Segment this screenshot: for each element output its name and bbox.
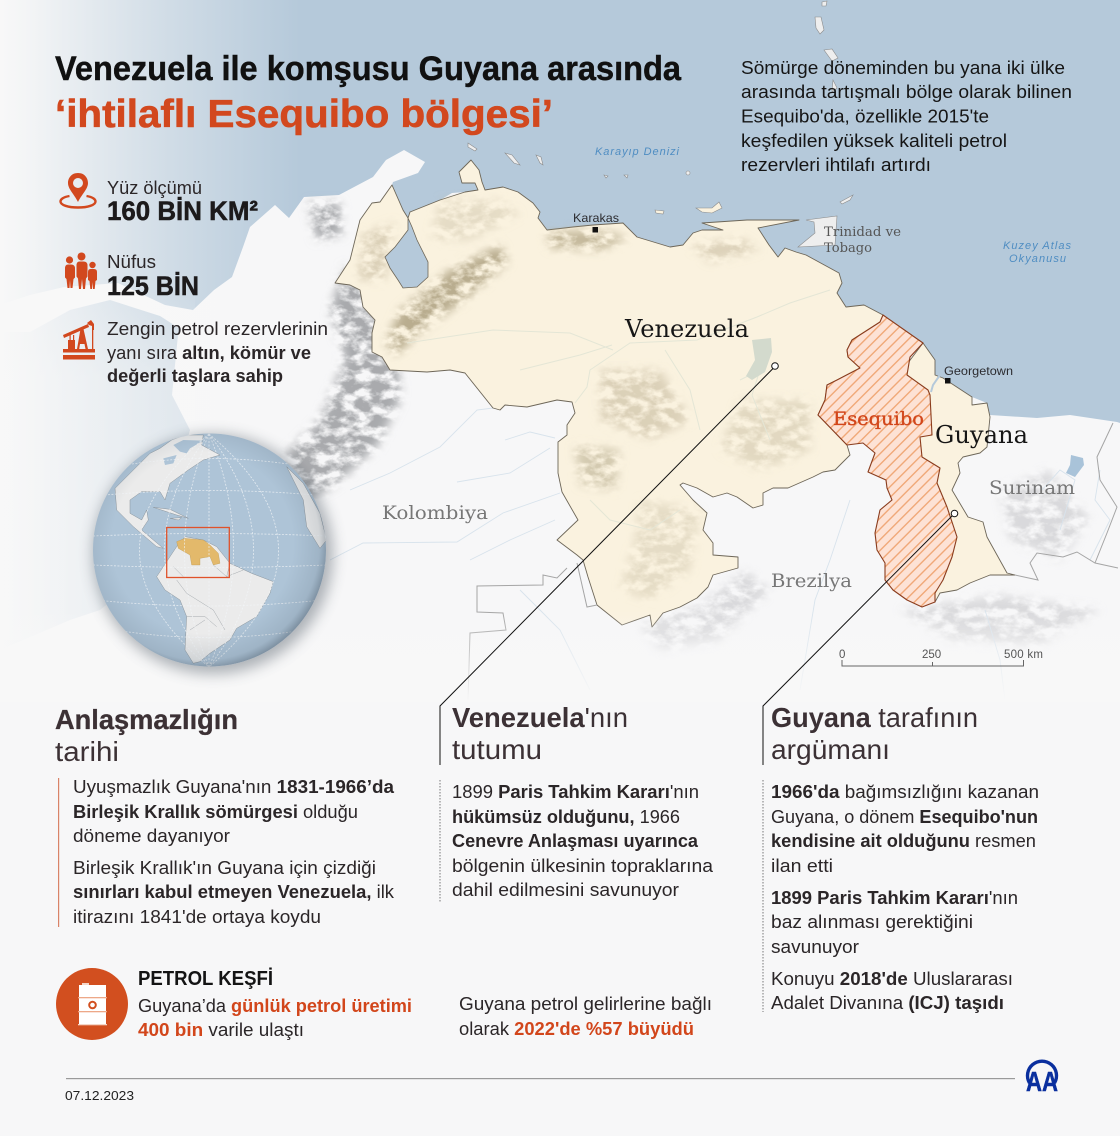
- history text: itirazını 1841'de ortaya koydu: [73, 907, 321, 927]
- disputed region: Esequibo: [818, 315, 957, 607]
- heading: Venezuela'nın: [452, 702, 628, 733]
- globe land: [115, 435, 327, 663]
- left side fade: [0, 0, 300, 700]
- country: Guyana: [880, 343, 1015, 602]
- map label: Brezilya: Brezilya: [771, 570, 852, 592]
- history text: Uyuşmazlık Guyana'nın 1831-1966’da: [73, 777, 395, 797]
- leader line to Guyana: [763, 510, 958, 765]
- intro paragraph: arasında tartışmalı bölge olarak bilinen: [741, 82, 1072, 102]
- Venezuela relief: [358, 200, 810, 600]
- Venezuela text: dahil edilmesini savunuyor: [452, 880, 679, 900]
- Colombia Brazil border: [468, 563, 597, 700]
- panel: dispute history: [55, 704, 395, 927]
- map label: Trinidad ve Tobago: [824, 225, 901, 256]
- stat: area: 160 BİN KM²: [107, 196, 258, 226]
- stat: resources: Zengin petrol rezervlerinin: [107, 319, 328, 339]
- map label: Venezuela: Venezuela: [624, 315, 749, 343]
- stat: area: [60, 173, 258, 226]
- map label: Trinidad ve Tobago: Tobago: [824, 241, 872, 256]
- scale bar: 0: [839, 649, 845, 661]
- sea label: Kuzey Atlas Okyanusu: Kuzey Atlas: [1003, 240, 1072, 252]
- history text: döneme dayanıyor: [73, 826, 230, 846]
- Guyana text: ilan etti: [771, 856, 833, 876]
- panel: Venezuela position: [440, 702, 714, 902]
- intro paragraph: rezervleri ihtilafı artırdı: [741, 155, 931, 175]
- stat: population: [65, 252, 199, 301]
- Surinam borders: [1015, 423, 1118, 580]
- icon: people: [65, 252, 97, 289]
- Venezuela text: Cenevre Anlaşması uyarınca: [452, 831, 699, 851]
- country: Venezuela: [335, 160, 883, 627]
- sea label: Kuzey Atlas Okyanusu: Okyanusu: [1009, 253, 1066, 265]
- scale bar: [839, 649, 1043, 666]
- Venezuela text: hükümsüz olduğunu, 1966: [452, 807, 680, 827]
- map label: Surinam: Surinam: [989, 477, 1075, 499]
- callout: oil revenue growth: [459, 994, 712, 1039]
- heading: Anlaşmazlığın: [55, 704, 238, 735]
- Lake Maracaibo: [385, 218, 428, 288]
- Venezuela text: [452, 782, 714, 900]
- title: ‘ihtilaflı Esequibo bölgesi’: [55, 93, 553, 136]
- callout: oil revenue growth: Guyana petrol gelirlerine bağlı: [459, 994, 712, 1014]
- heading: argümanı: [771, 734, 890, 765]
- Venezuela rivers: [407, 290, 830, 530]
- stat: resources: yanı sıra altın, kömür ve: [107, 343, 311, 363]
- history text: [73, 777, 395, 927]
- sea: [0, 0, 1120, 700]
- icon: location pin: [60, 173, 96, 208]
- Pacific fade: [0, 290, 195, 640]
- Guyana text: savunuyor: [771, 937, 859, 957]
- title: Venezuela ile komşusu Guyana arasında: [55, 50, 682, 88]
- icon: oil pump: [63, 320, 95, 360]
- scale bar: 500 km: [1004, 649, 1043, 661]
- locator globe: [93, 434, 333, 674]
- history text: Birleşik Krallık'ın Guyana için çizdiği: [73, 858, 376, 878]
- Guyana text: 1966'da bağımsızlığını kazanan: [771, 782, 1039, 802]
- Panama isthmus: [0, 283, 193, 332]
- city: Georgetown: Georgetown: [944, 364, 1013, 378]
- intro paragraph: Esequibo'da, özellikle 2015'te: [741, 106, 989, 126]
- map label: Guyana: Guyana: [935, 421, 1028, 449]
- locator rectangle: [167, 528, 229, 578]
- bottom fade: [0, 610, 1120, 702]
- callout: oil discovery: [138, 967, 412, 1040]
- stat: resources: [63, 319, 328, 386]
- stat: population: 125 BİN: [107, 271, 199, 301]
- heading: [55, 704, 238, 767]
- callout: oil revenue growth: olarak 2022'de %57 büyüdü: [459, 1019, 694, 1039]
- history text: sınırları kabul etmeyen Venezuela, ilk: [73, 882, 395, 902]
- logo: AA: AA: [1026, 1066, 1058, 1097]
- rivers of Colombia and Brazil: [330, 408, 1110, 700]
- stat: population: Nüfus: [107, 252, 156, 272]
- callout: oil discovery: 400 bin varile ulaştı: [138, 1020, 304, 1040]
- city: Karakas: Karakas: [573, 211, 619, 225]
- callout: oil discovery: Guyana’da günlük petrol üretimi: [138, 996, 412, 1016]
- panel: Guyana argument: [763, 702, 1039, 1013]
- map label: Trinidad ve Tobago: Trinidad ve: [824, 225, 901, 240]
- title: [55, 50, 682, 136]
- globe graticule: [93, 434, 326, 667]
- heading: tarihi: [55, 736, 119, 767]
- city: Georgetown: [944, 364, 1013, 384]
- map label: Kolombiya: Kolombiya: [382, 502, 488, 524]
- Guyana text: baz alınması gerektiğini: [771, 912, 973, 932]
- relief: Brazil and Guianas: [640, 470, 1100, 650]
- Guyana text: [771, 782, 1039, 1013]
- sea label: Karayıp Denizi: Karayıp Denizi: [595, 146, 680, 158]
- Guri reservoir: [746, 338, 772, 380]
- Guyana text: kendisine ait olduğunu resmen: [771, 831, 1036, 851]
- callout: oil discovery: PETROL KEŞFİ: [138, 967, 273, 990]
- Venezuela text: bölgenin ülkesinin topraklarına: [452, 856, 714, 876]
- map label: Esequibo: Esequibo: [833, 408, 924, 430]
- heading: tutumu: [452, 734, 542, 765]
- intro paragraph: [741, 58, 1072, 175]
- stat: resources: değerli taşlara sahip: [107, 366, 283, 386]
- history text: Birleşik Krallık sömürgesi olduğu: [73, 802, 358, 822]
- intro paragraph: Sömürge döneminden bu yana iki ülke: [741, 58, 1065, 78]
- Guyana text: 1899 Paris Tahkim Kararı 'nın: [771, 888, 1018, 908]
- intro paragraph: keşfedilen yüksek kaliteli petrol: [741, 131, 1007, 151]
- Brokopondo lake: [1066, 455, 1084, 477]
- Guyana text: Adalet Divanına (ICJ) taşıdı: [771, 993, 1004, 1013]
- heading: Guyana tarafının: [771, 702, 978, 733]
- leader line to Venezuela: [440, 363, 778, 765]
- Georgetown inlet: [931, 375, 940, 392]
- scale bar: 250: [922, 649, 941, 661]
- city: Karakas: [573, 211, 619, 232]
- icon: oil barrel: [56, 968, 128, 1040]
- heading: [771, 702, 978, 765]
- islands: [468, 1, 853, 247]
- sea label: Kuzey Atlas Okyanusu: [1003, 240, 1072, 265]
- stat: area: Yüz ölçümü: [107, 178, 202, 198]
- date: 07.12.2023: [65, 1088, 134, 1103]
- heading: [452, 702, 628, 765]
- Guyana text: Konuyu 2018'de Uluslararası: [771, 969, 1013, 989]
- Guyana text: Guyana, o dönem Esequibo'nun: [771, 807, 1038, 827]
- mountain relief: Colombia: [285, 203, 400, 505]
- Venezuela text: 1899 Paris Tahkim Kararı'nın: [452, 782, 699, 802]
